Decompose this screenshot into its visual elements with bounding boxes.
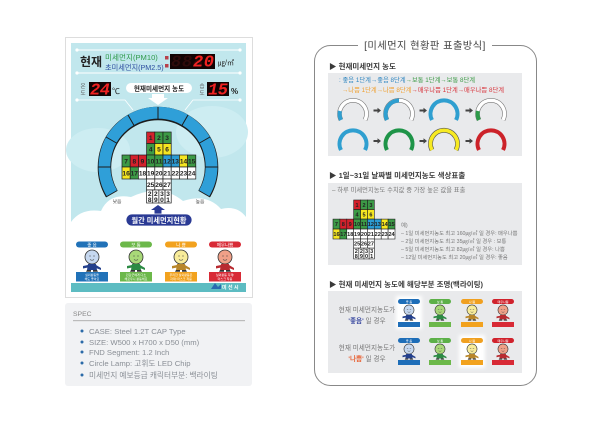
heading: current concentration pill	[75, 83, 242, 110]
panel: ring stages: : 좋음 1단계→좋음 8단계→보통 1단계→보통 8단계	[339, 75, 475, 84]
panel: current fine-dust reading: 8888	[171, 54, 214, 72]
panel: backlighting examples	[328, 291, 522, 373]
chart: small calendar grid: 6	[369, 212, 372, 218]
chart: monthly calendar grid: 4	[149, 147, 153, 154]
chart: monthly calendar grid: 2	[148, 191, 152, 198]
chart: monthly calendar grid: 0	[160, 197, 164, 204]
legend: good character	[76, 242, 108, 282]
chart: small calendar grid: 1	[356, 203, 359, 209]
panel: ring stages	[328, 73, 522, 156]
panel: backlighting examples: '좋음' 일 경우	[348, 316, 386, 325]
legend: normal character: 보 통	[131, 242, 141, 248]
chart: small calendar grid: 4	[356, 212, 360, 218]
panel: backlighting examples: '나쁨' 일 경우	[348, 354, 386, 363]
panel: specification: CASE: Steel 1.2T CAP Type	[89, 327, 186, 336]
chart: monthly calendar grid: 9	[154, 197, 158, 204]
panel: display method outline	[314, 40, 536, 386]
legend: bad character: 자제! 마스크 착용	[170, 276, 192, 281]
backlit row: bad: 보 통	[437, 338, 443, 343]
panel: specification: SPEC	[73, 311, 92, 318]
chart: monthly calendar grid: 22	[172, 170, 179, 178]
legend: good character: 실외활동을	[85, 272, 99, 277]
panel: current fine-dust reading: ㎍/㎡	[218, 59, 234, 68]
chart: monthly calendar grid: 25	[147, 182, 155, 189]
chart: monthly calendar grid: 2	[154, 191, 158, 198]
heading: monthly status pill with arrow	[126, 205, 192, 226]
chart: monthly calendar grid: 3	[166, 191, 170, 198]
chart: monthly calendar grid: 19	[147, 170, 155, 178]
title: [미세먼지 현황판 표출방식]	[364, 40, 486, 52]
chart: small calendar grid: 18	[347, 232, 353, 238]
legend: normal character: 해로우니 활동해요	[125, 276, 148, 281]
chart: monthly calendar grid: 3	[160, 191, 164, 198]
chart: monthly calendar grid: 8	[132, 158, 136, 166]
chart: monthly calendar grid: 24	[188, 170, 196, 178]
panel: daily colour display: 예)	[401, 221, 408, 229]
panel: daily colour display: – 2일 미세먼지농도 최고 35㎍/㎥ 일 경우 : 보통	[401, 237, 506, 246]
backlit row: bad: 좋 음	[406, 339, 412, 343]
chart: monthly calendar grid: 23	[180, 170, 187, 178]
panel: current fine-dust reading: 현재	[80, 54, 102, 69]
chart: small calendar grid: 0	[365, 254, 368, 260]
legend: normal character: 민감군에게 다소	[126, 272, 146, 277]
backlit row: good: 좋 음	[406, 300, 412, 304]
chart: monthly calendar grid: 8	[148, 197, 152, 204]
chart: small calendar grid: 8	[342, 222, 345, 228]
section heading: current concentration: ▶ 현재미세먼지 농도	[329, 61, 396, 71]
chart: small calendar grid: 8	[355, 254, 358, 260]
section heading: daily colour display: ▶ 1일~31일 날짜별 미세먼지농도 색상표출	[329, 170, 465, 180]
backlit row: bad: 나 쁨	[469, 338, 475, 343]
chart: small calendar grid: 5	[362, 212, 366, 218]
chart: small calendar grid: 13	[375, 222, 381, 228]
chart: monthly calendar grid: 1	[149, 135, 153, 142]
panel: daily colour display: – 5일 미세먼지농도 최고 82㎍/㎥ 일 경우: 나쁨	[401, 245, 505, 254]
panel: temperature: ℃	[112, 87, 120, 96]
chart: monthly calendar grid: 5	[157, 147, 161, 154]
panel: humidity	[199, 82, 238, 100]
chart: monthly calendar grid: 14	[180, 158, 187, 166]
chart: small calendar grid: 3	[365, 249, 368, 255]
legend: bad character	[165, 242, 197, 282]
chart: small calendar grid: 19	[354, 232, 360, 238]
chart: small calendar grid: 11	[361, 222, 367, 228]
legend: normal character	[120, 242, 152, 282]
chart: monthly calendar grid: 13	[172, 158, 179, 166]
chart: monthly calendar grid: 9	[141, 158, 145, 166]
chart: small calendar grid: 15	[388, 222, 395, 228]
chart: concentration ring: 낮음	[113, 198, 122, 205]
panel: current fine-dust reading: 미세먼지(PM10)	[105, 52, 158, 62]
chart: small calendar grid: 22	[375, 232, 381, 238]
chart: small calendar grid: 2	[355, 249, 358, 255]
panel: backlighting examples: 현재 미세먼지농도가	[339, 305, 395, 314]
chart: monthly calendar grid: 21	[163, 170, 171, 178]
chart: concentration ring	[98, 107, 218, 205]
panel: specification: FND Segment: 1.2 Inch	[89, 348, 169, 357]
chart: small calendar grid: 9	[349, 222, 352, 228]
chart: small calendar grid: 20	[361, 232, 367, 238]
panel: specification: SIZE: W500 x H700 x D50 (mm)	[89, 338, 200, 347]
chart: monthly calendar grid: 27	[163, 182, 171, 189]
chart: small calendar grid: 17	[340, 232, 346, 238]
chart: small calendar grid: 24	[388, 232, 396, 238]
backlit row: good: 나 쁨	[469, 299, 475, 304]
chart: monthly calendar grid: 10	[147, 158, 155, 166]
panel: temperature: 도	[80, 90, 86, 97]
panel: specification: Circle Lamp: 고휘도 LED Chip	[89, 359, 191, 368]
chart: small calendar grid: 26	[361, 242, 367, 248]
backlit row: bad	[398, 338, 514, 365]
chart: monthly calendar grid: 26	[155, 182, 163, 189]
panel: current fine-dust reading: 초미세먼지(PM2.5)	[105, 63, 164, 72]
legend: good character: 좋 음	[87, 242, 97, 248]
chart: monthly calendar grid: 12	[163, 158, 171, 166]
chart: monthly calendar grid	[122, 132, 196, 204]
panel: daily colour display: – 1일 미세먼지농도 최고 160㎍/㎥ 일 경우: 매우나쁨	[401, 229, 518, 238]
legend: very bad character: 마스크 착용	[218, 276, 233, 281]
chart: monthly calendar grid: 1	[166, 197, 170, 204]
chart: small calendar grid: 25	[354, 242, 360, 248]
panel: current fine-dust reading	[75, 48, 242, 75]
legend: very bad character	[209, 242, 241, 282]
section heading: backlighting: ▶ 현재 미세먼지 농도에 해당부분 조명(백라이팅)	[329, 279, 484, 289]
chart: small calendar grid: 2	[360, 249, 363, 255]
heading: monthly status pill with arrow: 월간 미세먼지현황	[132, 216, 187, 225]
chart: small calendar grid: 21	[368, 232, 374, 238]
backlit row: good	[398, 299, 514, 327]
chart: concentration ring: 높음	[196, 198, 205, 205]
panel: specification	[65, 303, 252, 386]
chart: monthly calendar grid: 15	[188, 158, 196, 166]
chart: monthly calendar grid: 17	[131, 170, 138, 178]
chart: small calendar grid: 7	[335, 222, 338, 228]
panel: humidity: 도	[199, 90, 205, 97]
chart: monthly calendar grid: 7	[124, 158, 128, 166]
legend: very bad character: 매우나쁨	[217, 242, 233, 248]
chart: small calendar grid	[333, 200, 396, 260]
panel: humidity: 15	[208, 82, 228, 100]
panel: humidity: 습	[199, 82, 205, 90]
chart: monthly calendar grid: 3	[165, 135, 169, 142]
backlit row: good: 보 통	[437, 299, 443, 304]
legend: good character: 해도 좋아요	[85, 276, 100, 281]
chart: small calendar grid: 9	[360, 254, 363, 260]
chart: monthly calendar grid: 2	[157, 135, 161, 142]
heading: current concentration pill: 현재미세먼지 농도	[134, 84, 184, 93]
logo	[211, 283, 239, 291]
backlit row: good: 매우나쁨	[497, 299, 509, 304]
panel: ring stages: →나쁨 1단계→나쁨 8단계→매우나쁨 1단계→매우나쁨 8단계	[342, 85, 504, 94]
chart: small calendar grid: 2	[362, 203, 366, 209]
chart: small calendar grid: 3	[369, 203, 372, 209]
panel: humidity: %	[231, 87, 238, 96]
chart: monthly calendar grid: 18	[139, 170, 146, 178]
chart: small calendar grid: 27	[368, 242, 374, 248]
chart: small calendar grid: 1	[370, 254, 373, 260]
panel: current fine-dust reading: 20	[193, 54, 214, 72]
panel: product display frame	[66, 38, 252, 298]
chart: small calendar grid: 12	[368, 222, 374, 228]
chart: small calendar grid: 16	[333, 232, 340, 238]
panel: temperature: 온	[80, 83, 86, 90]
panel: daily colour display: – 하루 미세먼지농도 수치값 중 가장 높은 값을 표출	[332, 185, 466, 194]
panel: daily colour display	[328, 183, 522, 265]
panel: temperature	[80, 82, 120, 100]
panel: temperature: 24	[90, 82, 110, 100]
legend: bad character: 나 쁨	[176, 242, 186, 248]
chart: small calendar grid: 23	[382, 232, 388, 238]
panel: specification: 미세먼지 예보등급 캐릭터부분: 백라이팅	[89, 370, 218, 380]
backlit row: bad: 매우나쁨	[497, 338, 509, 343]
legend: bad character: 무리한 실외활동은	[170, 272, 193, 277]
chart: monthly calendar grid: 11	[155, 158, 163, 166]
chart: small calendar grid: 10	[354, 222, 360, 228]
chart: small calendar grid: 14	[382, 222, 389, 228]
legend: very bad character: 실외활동 자제!	[216, 272, 234, 277]
panel: daily colour display: – 12일 미세먼지농도 최고 20㎍/㎥ 일 경우: 좋음	[401, 253, 508, 262]
chart: monthly calendar grid: 20	[155, 170, 163, 178]
chart: monthly calendar grid: 6	[165, 147, 169, 154]
chart: small calendar grid: 3	[370, 249, 373, 255]
chart: monthly calendar grid: 16	[122, 170, 130, 178]
panel: backlighting examples: 현재 미세먼지농도가	[339, 343, 395, 352]
logo: 미 선 시	[222, 284, 239, 291]
